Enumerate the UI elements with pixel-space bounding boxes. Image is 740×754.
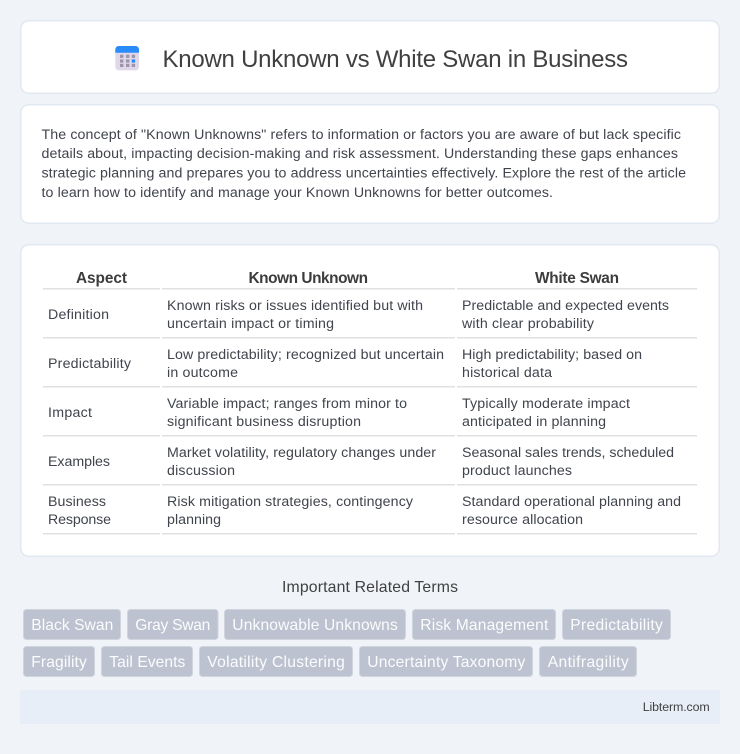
text block: introduction: to learn how to identify and manage your Known Unknowns for better outcomes. — [42, 185, 553, 201]
table row: business response: Business — [48, 494, 106, 510]
tag: Antifragility: Antifragility — [548, 654, 629, 671]
table row: impact — [43, 396, 697, 436]
table row: examples — [43, 445, 697, 486]
table row: definition: Definition — [48, 307, 109, 323]
panel: header — [21, 21, 719, 93]
table row: definition: Predictable and expected events — [462, 298, 669, 314]
heading: related terms: Important Related Terms — [282, 579, 458, 596]
tag: Risk Management: Risk Management — [420, 617, 549, 634]
icon: calendar — [115, 46, 139, 70]
panel: related term tags — [24, 610, 670, 676]
panel: introduction — [21, 105, 719, 223]
table row: examples: product launches — [462, 463, 572, 479]
table row: impact: Impact — [48, 405, 92, 421]
table row: examples: discussion — [167, 463, 235, 479]
table row: predictability — [43, 347, 697, 388]
table row: business response: planning — [167, 512, 221, 528]
table row: predictability: High predictability; based on — [462, 347, 642, 363]
table row: examples: Examples — [48, 454, 110, 470]
tag: Volatility Clustering: Volatility Clustering — [207, 654, 345, 671]
table row: business response: Response — [48, 512, 111, 528]
table row: business response: Standard operational planning and — [462, 494, 681, 510]
table row: business response — [43, 494, 697, 534]
table header: Known Unknown — [248, 270, 368, 287]
table row: impact: Typically moderate impact — [462, 396, 630, 412]
tag: Fragility — [24, 646, 94, 676]
tag: Antifragility — [540, 646, 636, 676]
footer — [20, 690, 720, 724]
text block: introduction: details about, impacting decision-making and risk assessment. Understanding these gaps enhances — [42, 146, 678, 162]
tag: Volatility Clustering — [200, 646, 352, 676]
tag: Black Swan: Black Swan — [31, 617, 113, 634]
tag: Predictability: Predictability — [570, 617, 663, 634]
table row: business response: resource allocation — [462, 512, 583, 528]
tag: Uncertainty Taxonomy — [360, 646, 532, 676]
tag: Unknowable Unknowns: Unknowable Unknowns — [232, 617, 398, 634]
table header — [43, 270, 697, 290]
table row: predictability: historical data — [462, 365, 552, 381]
footer credit: Libterm.com — [643, 700, 710, 714]
tag: Predictability — [562, 610, 670, 640]
tag: Gray Swan: Gray Swan — [135, 617, 210, 634]
tag: Tail Events — [102, 646, 192, 676]
table row: impact: anticipated in planning — [462, 414, 606, 430]
tag: Uncertainty Taxonomy: Uncertainty Taxonomy — [367, 654, 526, 671]
table row: definition: uncertain impact or timing — [167, 316, 334, 332]
text block: introduction: strategic planning and prepares you to address uncertainties effectively. Explore the rest of the article — [42, 166, 686, 182]
tag: Tail Events: Tail Events — [109, 654, 186, 671]
tag: Unknowable Unknowns — [224, 610, 406, 640]
table header: White Swan — [535, 270, 619, 287]
table row: impact: Variable impact; ranges from minor to — [167, 396, 407, 412]
table row: definition: Known risks or issues identified but with — [167, 298, 423, 314]
table row: examples: Seasonal sales trends, scheduled — [462, 445, 674, 461]
tag: Gray Swan — [128, 610, 218, 640]
text block: introduction: The concept of "Known Unknowns" refers to information or factors you are aware of but lack specific — [42, 127, 681, 143]
table row: predictability: Predictability — [48, 356, 132, 372]
tag: Black Swan — [24, 610, 120, 640]
table row: impact: significant business disruption — [167, 414, 361, 430]
table row: predictability: Low predictability; recognized but uncertain — [167, 347, 444, 363]
table row: examples: Market volatility, regulatory changes under — [167, 445, 436, 461]
text block: introduction — [42, 127, 686, 201]
title: Known Unknown vs White Swan in Business — [162, 46, 628, 73]
table row: business response: Risk mitigation strategies, contingency — [167, 494, 414, 510]
table row: predictability: in outcome — [167, 365, 238, 381]
table row: definition: with clear probability — [461, 316, 595, 332]
table header: Aspect — [76, 270, 127, 287]
tag: Risk Management — [412, 610, 556, 640]
table row: definition — [43, 298, 697, 338]
panel: comparison table — [21, 245, 719, 556]
tag: Fragility: Fragility — [31, 654, 87, 671]
